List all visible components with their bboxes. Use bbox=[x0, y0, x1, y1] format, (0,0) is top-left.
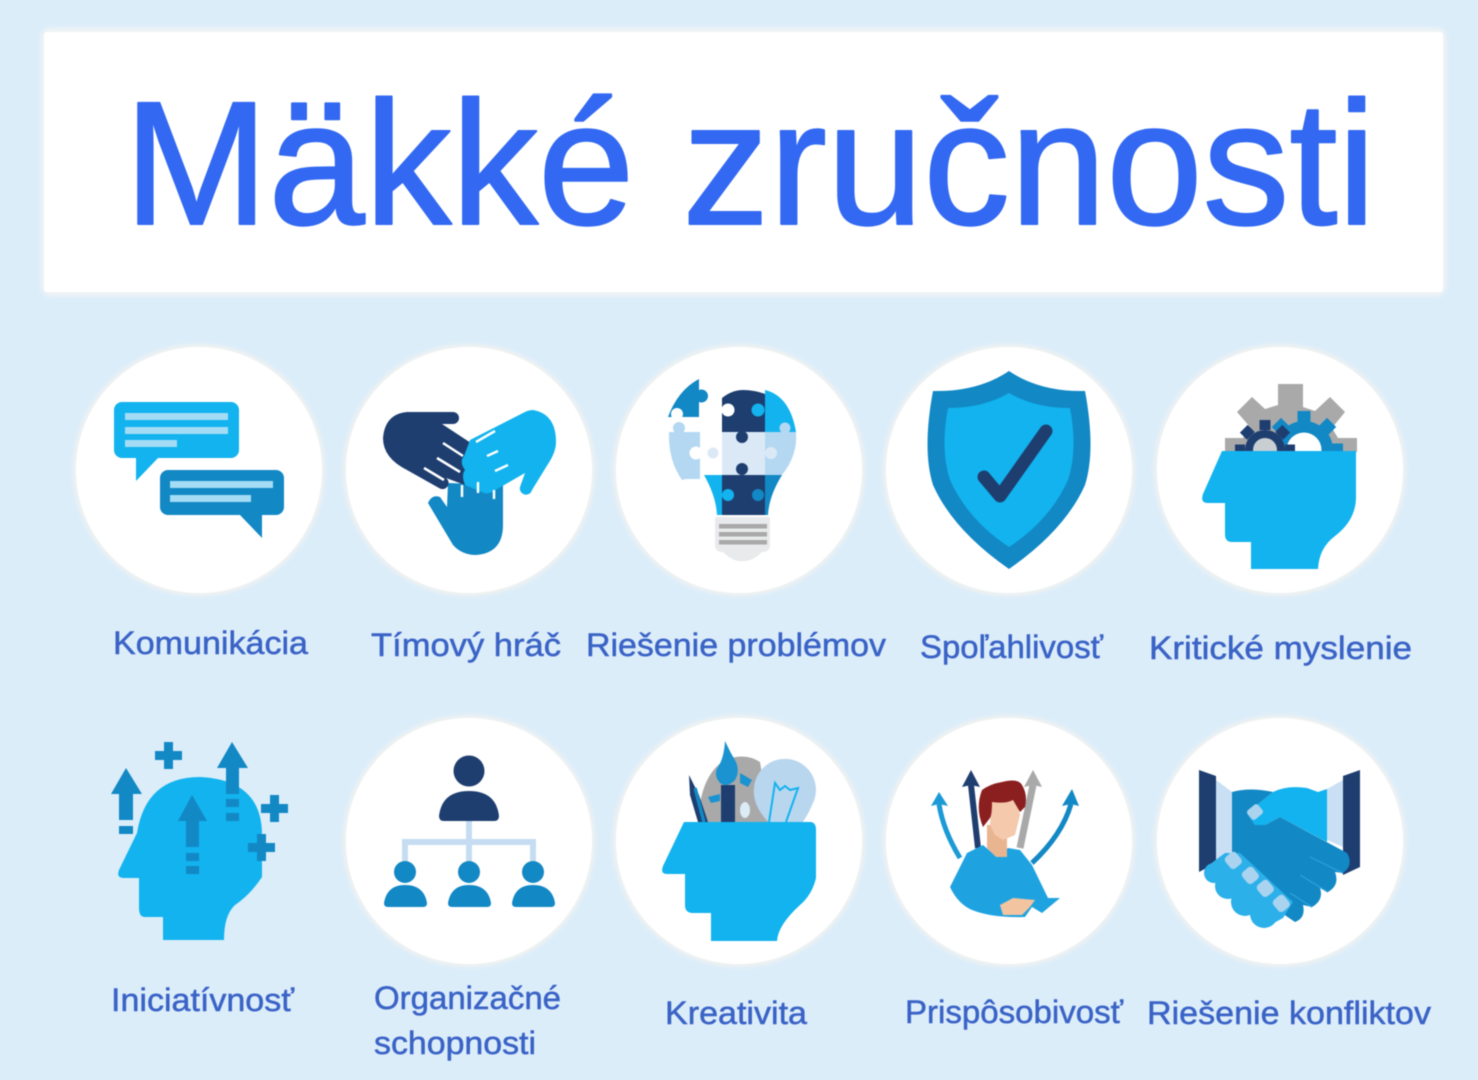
label: Tímový hráč bbox=[371, 627, 561, 663]
icon: shield with check bbox=[928, 371, 1090, 569]
panel: Kreativita bbox=[614, 716, 864, 1031]
label: Riešenie problémov bbox=[586, 627, 886, 663]
label: schopnosti bbox=[374, 1025, 536, 1061]
icon: person with arrows bbox=[931, 770, 1079, 917]
icon: puzzle light bulb bbox=[668, 379, 796, 561]
panel: Iniciatívnosť bbox=[111, 742, 295, 1018]
label: Prispôsobivosť bbox=[905, 994, 1124, 1030]
panel: Organizačné schopnosti bbox=[344, 716, 594, 1061]
icon: head with arrows and plus signs bbox=[111, 742, 288, 940]
label: Spoľahlivosť bbox=[920, 629, 1104, 665]
icon: handshake bbox=[1199, 770, 1360, 928]
panel: Tímový hráč bbox=[344, 344, 594, 663]
panel: Kritické myslenie bbox=[1149, 344, 1412, 666]
title banner bbox=[41, 28, 1446, 296]
icon: three hands bbox=[383, 410, 556, 555]
label: Organizačné bbox=[374, 980, 561, 1016]
panel: Spoľahlivosť bbox=[884, 344, 1134, 665]
label bbox=[374, 980, 561, 1061]
panel: Riešenie konfliktov bbox=[1147, 716, 1431, 1031]
label: Komunikácia bbox=[113, 625, 308, 661]
icon: head with gears bbox=[1202, 384, 1357, 569]
label: Kritické myslenie bbox=[1149, 630, 1412, 666]
title: Mäkké zručnosti bbox=[124, 66, 1376, 262]
label: Kreativita bbox=[665, 995, 807, 1031]
label: Iniciatívnosť bbox=[111, 982, 295, 1018]
icon: head with art tools bbox=[662, 741, 816, 941]
icon: organisation chart bbox=[384, 756, 555, 907]
panel: Prispôsobivosť bbox=[884, 716, 1134, 1030]
panel: Riešenie problémov bbox=[586, 344, 886, 663]
label: Riešenie konfliktov bbox=[1147, 995, 1431, 1031]
icon: speech bubbles bbox=[114, 402, 284, 538]
panel: Komunikácia bbox=[74, 344, 324, 661]
